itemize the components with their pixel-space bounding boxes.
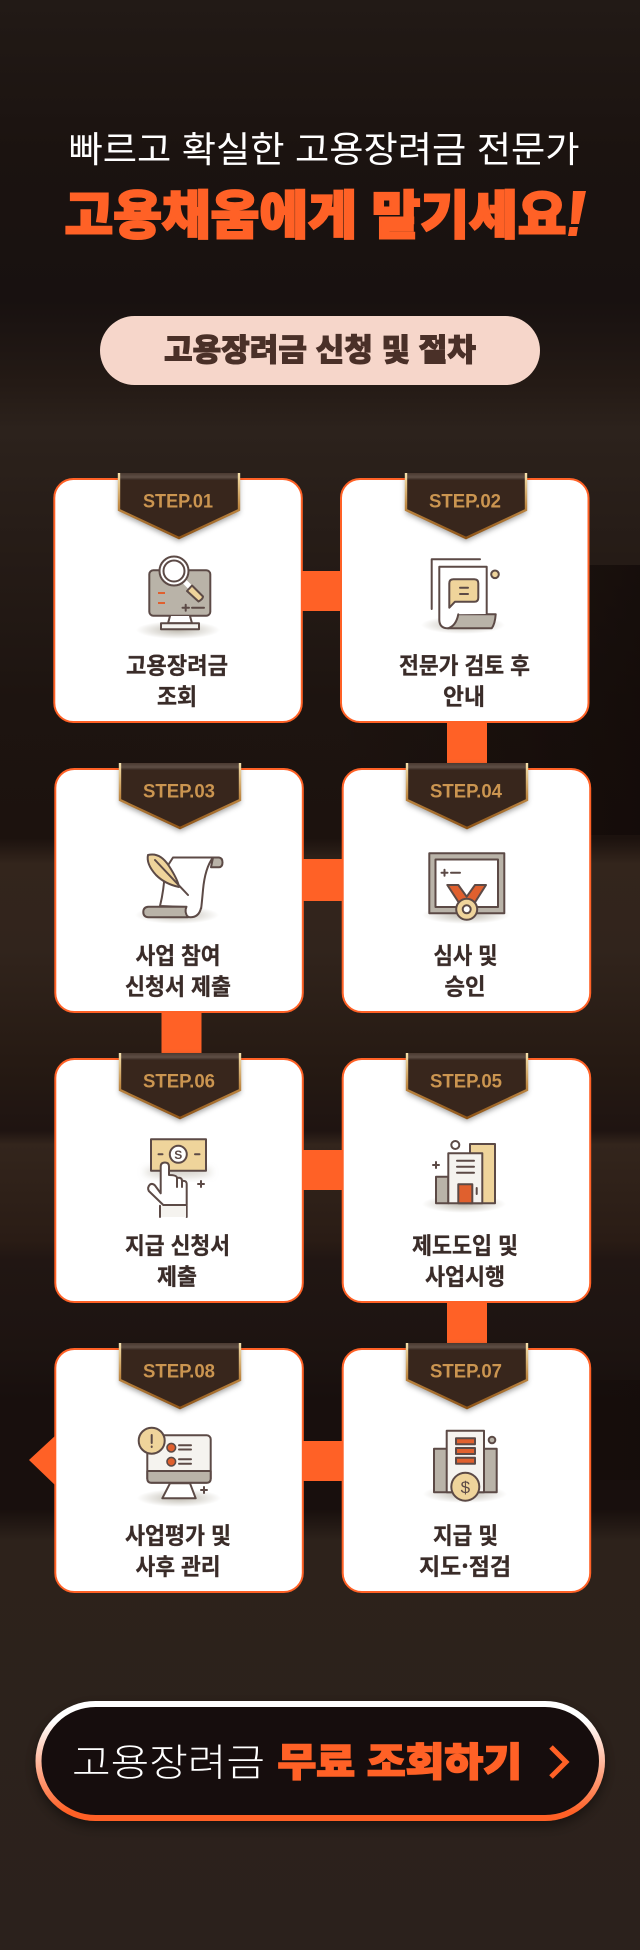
panel: step 01: STEP.01 [143, 490, 213, 512]
panel: step 02: 전문가 검토 후 [399, 646, 530, 680]
panel: step 03: 사업 참여 [136, 936, 220, 970]
panel: step 06: 제출 [157, 1258, 197, 1292]
panel: step 07: STEP.07 [430, 1360, 502, 1382]
icon: scroll and quill [135, 854, 222, 924]
call-to-action button [38, 1704, 602, 1818]
panel: step 05: STEP.05 [430, 1070, 502, 1092]
panel: step 08: STEP.08 [143, 1360, 215, 1382]
icon: document with speech bubble [421, 559, 505, 634]
panel: step 07: 지급 및 [433, 1516, 498, 1550]
panel: step 07: 지도·점검 [419, 1548, 511, 1582]
call-to-action button: 무료 조회하기 [278, 1732, 522, 1788]
heading: first line: 빠르고 확실한 고용장려금 전문가 [68, 121, 580, 173]
panel: step 01: 조회 [157, 678, 197, 712]
panel: step 04: 심사 및 [434, 936, 498, 970]
arrow: exit from step 8 [29, 1435, 56, 1486]
icon: monitor with magnifier [136, 556, 220, 639]
icon: banknote and pointing hand [144, 1139, 212, 1217]
panel: step 04: 승인 [444, 968, 486, 1002]
panel: step 03: 신청서 제출 [125, 968, 231, 1002]
icon: building with coin [423, 1431, 507, 1503]
panel: step 08 [55, 1343, 303, 1592]
connector: step 3 to 6 [162, 1010, 202, 1053]
icon: chevron [551, 1747, 566, 1777]
panel: step 07 [343, 1343, 590, 1592]
panel: step 04: STEP.04 [430, 780, 502, 802]
connector: step 1 to 2 [300, 571, 344, 611]
panel: step 08: 사후 관리 [136, 1548, 220, 1582]
icon: building with coin: $ [461, 1478, 471, 1497]
connector: step 2 to 4 [447, 720, 487, 763]
panel: step 08: 사업평가 및 [125, 1516, 231, 1550]
panel: step 04 [343, 763, 590, 1012]
panel: step 02: 안내 [443, 678, 485, 712]
panel: step 01: 고용장려금 [126, 646, 228, 680]
icon: monitor with alert [137, 1428, 221, 1507]
panel: step 06: STEP.06 [143, 1070, 215, 1092]
section title pill: 고용장려금 신청 및 절차 [164, 325, 476, 370]
panel: step 05: 사업시행 [425, 1258, 505, 1292]
panel: step 06 [55, 1053, 303, 1302]
panel: step 05 [343, 1053, 590, 1302]
panel: step 03 [55, 763, 303, 1012]
panel: step 02 [341, 473, 588, 722]
panel: step 01 [54, 473, 302, 722]
heading: second line: 고용채움에게 맡기세요 [64, 174, 566, 249]
panel: step 02: STEP.02 [429, 490, 501, 512]
section title pill [100, 316, 540, 385]
panel: step 03: STEP.03 [143, 780, 215, 802]
connector: step 6 to 5 [300, 1150, 344, 1190]
icon: banknote and pointing hand: S [174, 1148, 182, 1162]
connector: step 5 to 7 [447, 1300, 487, 1343]
call-to-action button: 고용장려금 [72, 1732, 265, 1787]
panel: step 06: 지급 신청서 [125, 1226, 230, 1260]
connector: step 4 to 3 [300, 859, 344, 901]
panel: step 05: 제도도입 및 [412, 1226, 518, 1260]
icon: office buildings [422, 1141, 506, 1213]
icon: certificate with medal [422, 853, 510, 924]
connector: step 7 to 8 [300, 1441, 344, 1481]
